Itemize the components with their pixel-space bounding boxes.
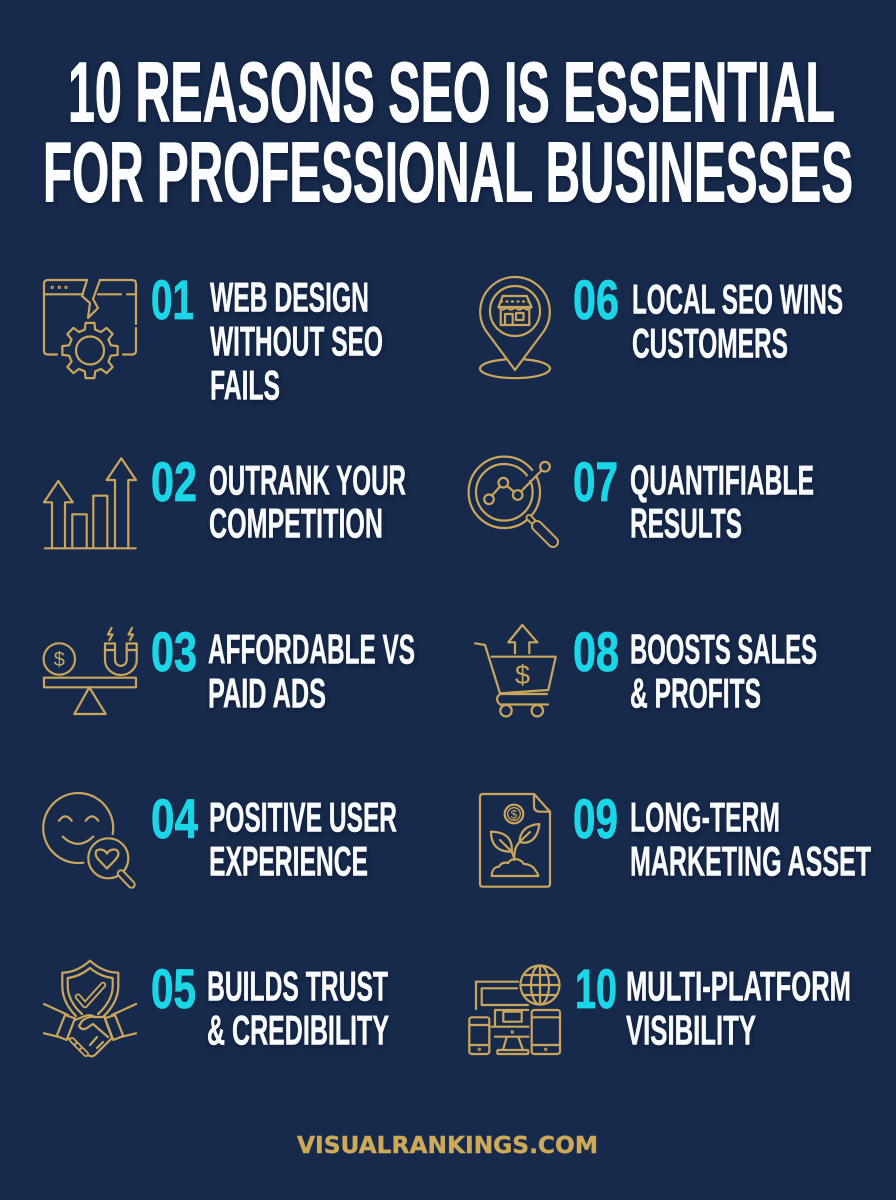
label 07	[630, 456, 814, 546]
item 06: local SEO wins customers	[480, 269, 843, 378]
icon: document with growing plant	[480, 794, 550, 887]
label 09: LONG-TERM	[630, 794, 780, 840]
icon: globe and connected devices	[469, 966, 560, 1054]
item 01: web design without SEO fails	[44, 269, 383, 408]
icon: map pin with shop	[480, 277, 550, 378]
label 01	[210, 274, 383, 408]
label 01: WITHOUT SEO	[210, 318, 383, 364]
icon: shopping cart with dollar and arrow	[475, 625, 556, 716]
icon: smiley with heart magnifier	[43, 793, 132, 884]
label 05	[207, 962, 389, 1054]
icon: balance with coin and magnet: $	[54, 649, 65, 671]
icon: rising bars and arrows	[44, 458, 136, 548]
label 04: EXPERIENCE	[209, 838, 368, 884]
item 04: positive user experience	[43, 788, 397, 884]
label 08	[630, 626, 817, 716]
label 07: RESULTS	[630, 500, 742, 546]
label 03: PAID ADS	[208, 670, 326, 716]
label 08: & PROFITS	[630, 670, 761, 716]
label 03: AFFORDABLE VS	[208, 626, 415, 672]
label 01: FAILS	[210, 362, 280, 408]
item 07: quantifiable results	[469, 451, 814, 546]
number 07: 07	[573, 451, 618, 513]
footer website: VISUALRANKINGS.COM	[297, 1131, 598, 1159]
number 02: 02	[151, 451, 197, 513]
item 09: long-term marketing asset	[480, 788, 871, 887]
label 05: BUILDS TRUST	[207, 962, 388, 1010]
label 01: WEB DESIGN	[210, 274, 369, 320]
item 02: outrank your competition	[44, 451, 406, 548]
icon: broken browser window with gear	[44, 280, 136, 378]
number 06: 06	[573, 269, 619, 331]
number 08: 08	[573, 621, 619, 683]
label 06	[632, 276, 843, 366]
label 02: COMPETITION	[209, 500, 383, 546]
number 03: 03	[151, 621, 197, 683]
label 10	[626, 962, 851, 1054]
number 09: 09	[573, 788, 618, 850]
icon: shopping cart with dollar and arrow: $	[515, 660, 530, 690]
label 05: & CREDIBILITY	[207, 1006, 389, 1054]
number 01: 01	[151, 269, 194, 331]
icon: magnifier with line chart	[469, 457, 553, 542]
label 03	[208, 626, 415, 716]
item 10: multi-platform visibility	[469, 958, 851, 1054]
label 09	[630, 794, 871, 884]
number 04: 04	[151, 788, 198, 850]
label 02: OUTRANK YOUR	[209, 456, 406, 504]
label 04: POSITIVE USER	[209, 794, 397, 840]
number 10: 10	[575, 958, 617, 1020]
icon: document with growing plant: $	[511, 808, 518, 822]
icon: shield and handshake	[44, 961, 136, 1056]
icon: balance with coin and magnet	[44, 628, 137, 714]
label 06: CUSTOMERS	[632, 320, 788, 366]
label 04	[209, 794, 397, 884]
label 02	[209, 456, 406, 546]
item 05: builds trust and credibility	[44, 958, 389, 1056]
title	[43, 46, 853, 220]
label 10: VISIBILITY	[626, 1006, 756, 1054]
number 05: 05	[151, 958, 196, 1020]
item 08: boosts sales and profits	[475, 621, 817, 716]
item 03: affordable vs paid ads	[44, 621, 415, 716]
